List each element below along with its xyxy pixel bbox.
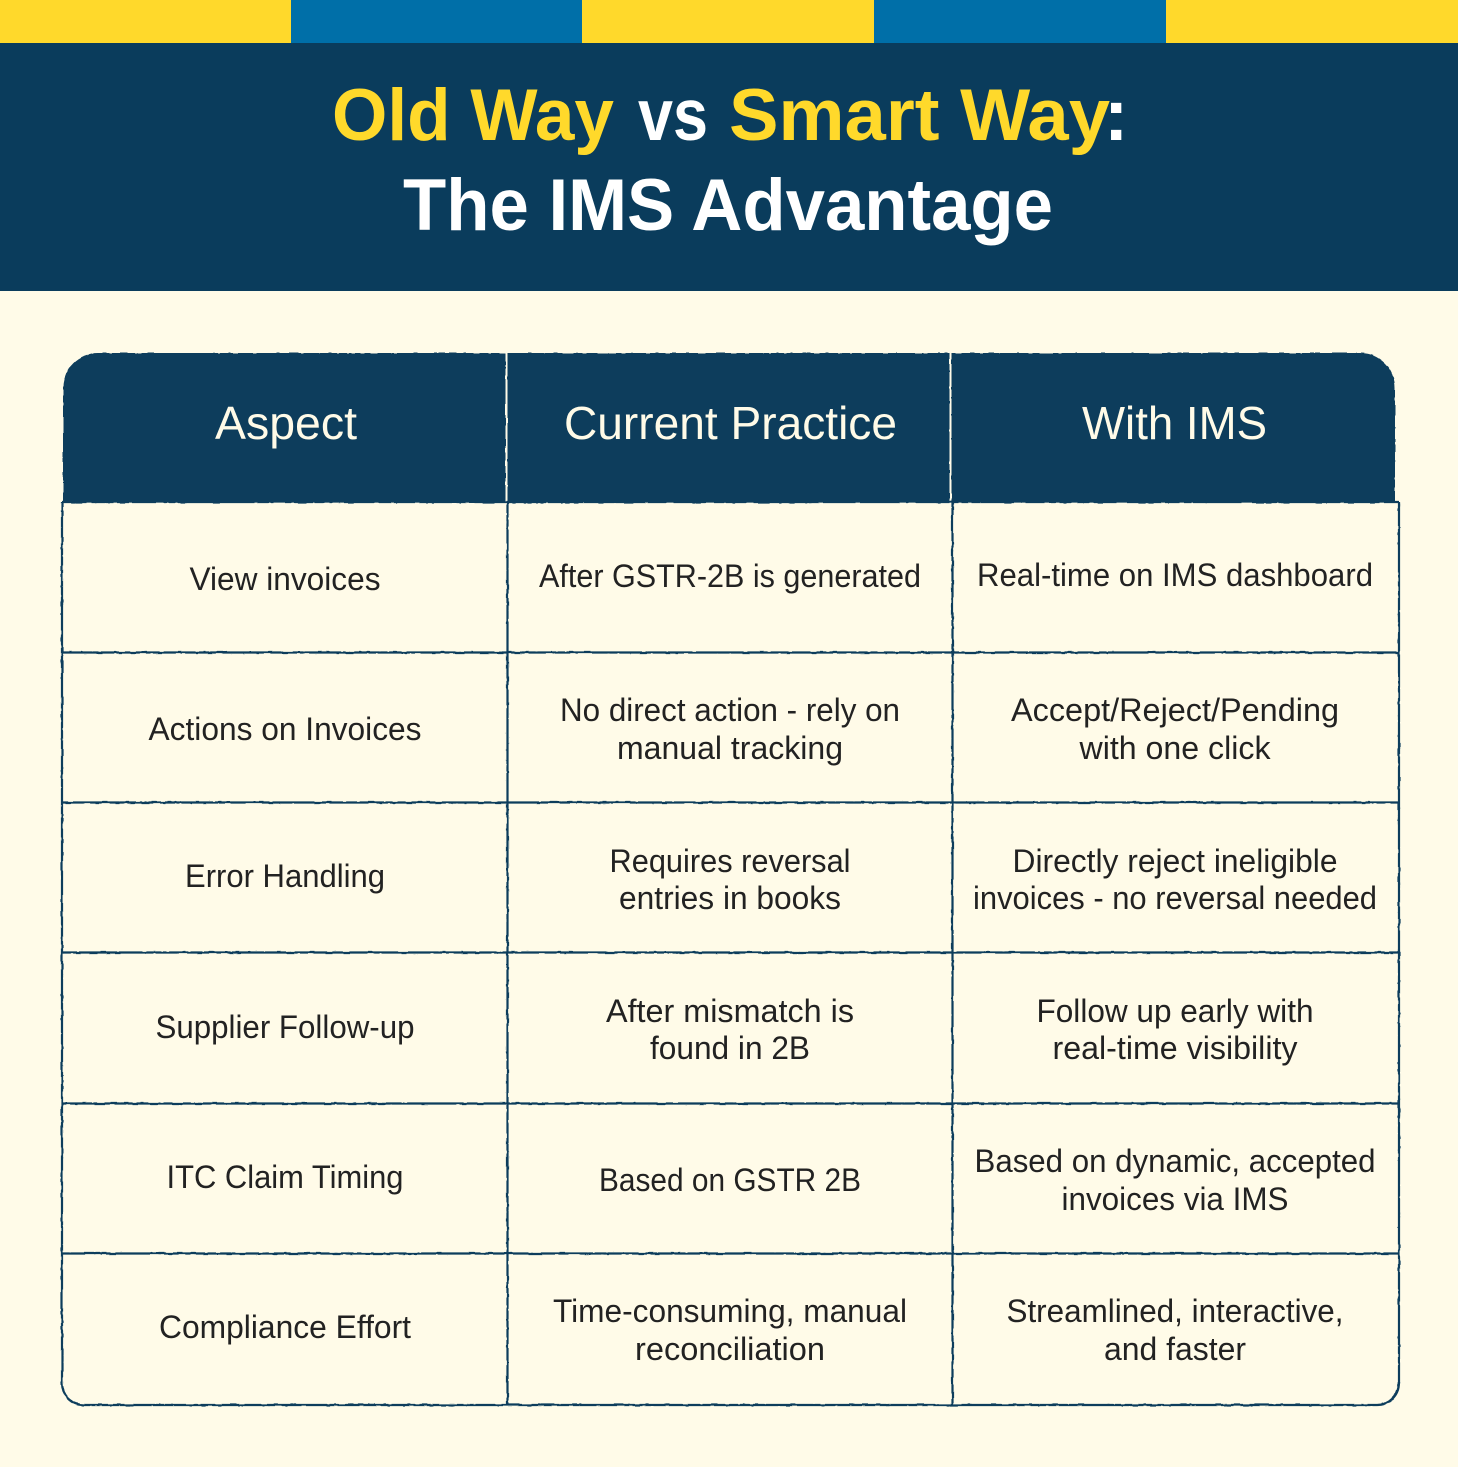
- row: ITC Claim Timing: invoices via IMS: [1062, 1181, 1288, 1217]
- title line 1: [332, 75, 1128, 156]
- row: Actions on Invoices: Actions on Invoices: [148, 711, 422, 747]
- row: Error Handling: Error Handling: [185, 858, 385, 894]
- row: Actions on Invoices: manual tracking: [617, 730, 843, 766]
- row: Compliance Effort: Time-consuming, manual: [553, 1293, 907, 1329]
- row: ITC Claim Timing: [166, 1143, 1376, 1217]
- title line 1: Smart Way: [729, 75, 1110, 156]
- row: Error Handling: invoices - no reversal needed: [973, 880, 1377, 916]
- top colour strip: [0, 0, 1458, 44]
- row: Compliance Effort: Streamlined, interactive,: [1006, 1293, 1344, 1329]
- header: With IMS: With IMS: [1082, 397, 1267, 449]
- table grid: [62, 502, 1399, 1405]
- row: Supplier Follow-up: real-time visibility: [1052, 1030, 1298, 1066]
- table header: [63, 353, 1395, 502]
- row: Compliance Effort: Compliance Effort: [159, 1309, 411, 1345]
- row: Actions on Invoices: No direct action - rely on: [560, 692, 900, 728]
- row: Supplier Follow-up: Supplier Follow-up: [156, 1009, 414, 1045]
- row: Supplier Follow-up: found in 2B: [650, 1030, 810, 1066]
- row: ITC Claim Timing: ITC Claim Timing: [166, 1159, 404, 1195]
- row: Error Handling: [185, 843, 1377, 916]
- row: ITC Claim Timing: Based on dynamic, accepted: [974, 1143, 1376, 1179]
- row: View invoices: View invoices: [190, 561, 380, 597]
- row: Error Handling: Requires reversal: [610, 843, 850, 879]
- title line 1: vs: [638, 75, 708, 156]
- row: View invoices: After GSTR-2B is generated: [539, 558, 921, 594]
- row: Compliance Effort: and faster: [1104, 1331, 1246, 1367]
- title line 1: Old Way: [332, 75, 614, 156]
- row: Compliance Effort: [159, 1293, 1344, 1367]
- row: Supplier Follow-up: [156, 993, 1314, 1066]
- row: ITC Claim Timing: Based on GSTR 2B: [599, 1162, 861, 1198]
- header: Aspect: Aspect: [215, 397, 357, 449]
- row: View invoices: [190, 557, 1373, 597]
- row: Actions on Invoices: with one click: [1078, 730, 1272, 766]
- row: Supplier Follow-up: After mismatch is: [606, 993, 854, 1029]
- row: Actions on Invoices: Accept/Reject/Pending: [1011, 692, 1339, 728]
- row: Error Handling: Directly reject ineligible: [1012, 843, 1338, 879]
- header: Current Practice: Current Practice: [564, 397, 897, 449]
- row: Supplier Follow-up: Follow up early with: [1036, 993, 1314, 1029]
- row: Compliance Effort: reconciliation: [635, 1331, 825, 1367]
- row: Actions on Invoices: [148, 692, 1339, 766]
- row: Error Handling: entries in books: [619, 880, 841, 916]
- comparison table: [62, 353, 1399, 1405]
- row: View invoices: Real-time on IMS dashboard: [977, 557, 1373, 593]
- title line 1: :: [1104, 75, 1128, 156]
- title line 2: The IMS Advantage: [403, 165, 1053, 246]
- title banner: [0, 43, 1458, 291]
